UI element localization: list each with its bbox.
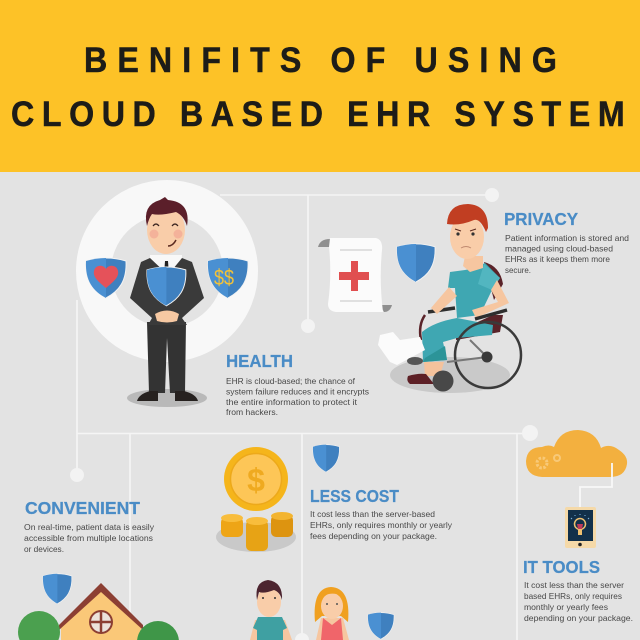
text: less cost description: [310, 509, 453, 541]
icon: tablet with light bulb: [565, 507, 596, 548]
icon: man's hands: [155, 310, 179, 322]
heading: health: HEALTH: [226, 351, 293, 371]
ring behind man: [94, 198, 240, 344]
illustration: boy: [250, 580, 292, 640]
heading: less cost: LESS COST: [310, 486, 399, 506]
text: privacy description: managed using cloud-based: [505, 244, 613, 254]
text: privacy description: Patient information is stored and: [505, 233, 629, 243]
text: health description: the entire information to protect it: [226, 397, 358, 407]
text: less cost description: EHRs, only requires monthly or yearly: [310, 520, 453, 530]
icon: dollar shield: $$: [214, 265, 234, 290]
icon: cloud: [526, 430, 627, 477]
text: privacy description: EHRs as it keeps them more: [505, 254, 610, 264]
icon: couple shield: [368, 613, 394, 639]
title: CLOUD BASED EHR SYSTEM: [11, 96, 625, 134]
illustration: medical scroll: [318, 238, 392, 312]
text: health description: from hackers.: [226, 407, 278, 417]
text: it tools description: depending on your package.: [524, 613, 633, 623]
illustration: gold coins: $: [247, 462, 265, 498]
icon: heart shield: [86, 258, 126, 298]
text: it tools description: monthly or yearly fees: [524, 602, 608, 612]
illustration: patient in wheelchair: [378, 204, 521, 393]
text: health description: system failure reduces and it encrypts: [226, 386, 369, 396]
illustration: house with trees: [18, 583, 179, 640]
header banner: [0, 0, 640, 172]
text: it tools description: [524, 580, 633, 623]
illustration: gold coins: [216, 447, 296, 552]
title: [11, 42, 625, 134]
text: convenient description: accessible from multiple locations: [24, 533, 153, 543]
text: privacy description: [505, 233, 629, 275]
connector lines: [70, 188, 538, 640]
illustration: cloud and tablet: [526, 430, 627, 548]
text: health description: [226, 376, 369, 417]
icon: dollar shield: [208, 258, 248, 298]
heading: convenient: CONVENIENT: [25, 498, 140, 518]
text: privacy description: secure.: [505, 265, 531, 275]
icon: scroll shield: [397, 244, 435, 282]
text: it tools description: based EHRs, only requires: [524, 591, 622, 601]
icon: house shield: [43, 574, 72, 604]
text: convenient description: On real-time, patient data is easily: [24, 522, 155, 532]
text: less cost description: fees depending on your package.: [310, 531, 437, 541]
text: convenient description: or devices.: [24, 544, 64, 554]
illustration: man holding shield: [127, 197, 207, 407]
title: BENIFITS OF USING: [84, 42, 557, 80]
text: convenient description: [24, 522, 155, 554]
heading: privacy: PRIVACY: [504, 209, 578, 229]
icon: chest shield: [147, 267, 186, 306]
icon: less cost shield: [313, 445, 339, 472]
text: less cost description: It cost less than the server-based: [310, 509, 435, 519]
text: health description: EHR is cloud-based; the chance of: [226, 376, 356, 386]
illustration: girl: [315, 587, 349, 640]
text: it tools description: It cost less than the server: [524, 580, 624, 590]
heading: it tools: IT TOOLS: [523, 557, 600, 577]
